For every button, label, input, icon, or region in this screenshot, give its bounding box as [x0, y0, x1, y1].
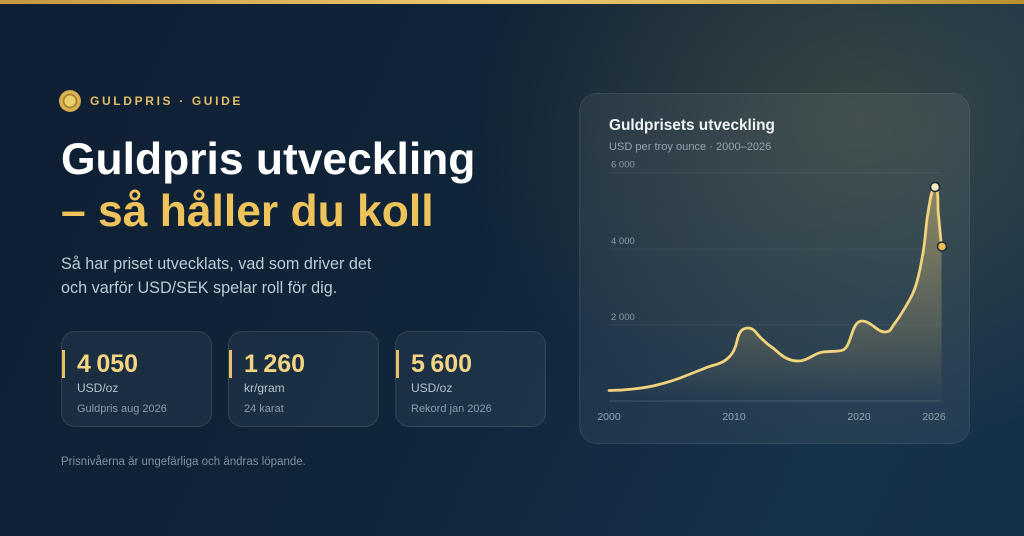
- chart subtitle: USD per troy ounce · 2000–2026: [609, 140, 771, 152]
- title: [61, 135, 475, 236]
- stat card: current price: 4 050: [77, 350, 138, 378]
- price curve: [609, 187, 942, 390]
- x axis labels: 2000: [597, 411, 621, 423]
- icon: gold coin: [59, 90, 81, 112]
- title: – så håller du koll: [61, 187, 434, 236]
- footnote: Prisnivåerna är ungefärliga och ändras löpande.: [61, 456, 306, 468]
- stat card: price per gram: [228, 331, 379, 427]
- x axis labels: 2010: [722, 411, 746, 423]
- record marker: [930, 182, 940, 192]
- y axis labels: 4 000: [611, 236, 635, 247]
- grid lines: [609, 173, 942, 401]
- stat card: current price: [61, 331, 212, 427]
- y axis labels: 6 000: [611, 160, 635, 170]
- eyebrow label: GULDPRIS · GUIDE: [90, 94, 243, 108]
- area under curve: [609, 187, 942, 401]
- panel: chart: [579, 93, 970, 444]
- top gold bar: [0, 0, 1024, 4]
- chart title: Guldprisets utveckling: [609, 116, 775, 134]
- x axis labels: [597, 411, 946, 423]
- stat card: record: 5 600: [411, 350, 472, 378]
- stat card: price per gram: 24 karat: [244, 403, 284, 415]
- x axis labels: 2020: [847, 411, 871, 423]
- y axis labels: [611, 160, 635, 323]
- x axis labels: 2026: [922, 411, 946, 423]
- intro text: [61, 255, 372, 297]
- y axis labels: 2 000: [611, 312, 635, 323]
- stat card: record: Rekord jan 2026: [411, 403, 492, 415]
- current price marker: [938, 242, 946, 251]
- stat card: price per gram: 1 260: [244, 350, 305, 378]
- stat card: record: USD/oz: [411, 381, 452, 395]
- stat card: record: [395, 331, 546, 427]
- stat card: current price: USD/oz: [77, 381, 118, 395]
- stat card: current price: Guldpris aug 2026: [77, 403, 167, 415]
- title: Guldpris utveckling: [61, 135, 475, 184]
- intro text: Så har priset utvecklats, vad som driver det: [61, 255, 371, 273]
- stat card: price per gram: kr/gram: [244, 381, 285, 395]
- intro text: och varför USD/SEK spelar roll för dig.: [61, 279, 337, 297]
